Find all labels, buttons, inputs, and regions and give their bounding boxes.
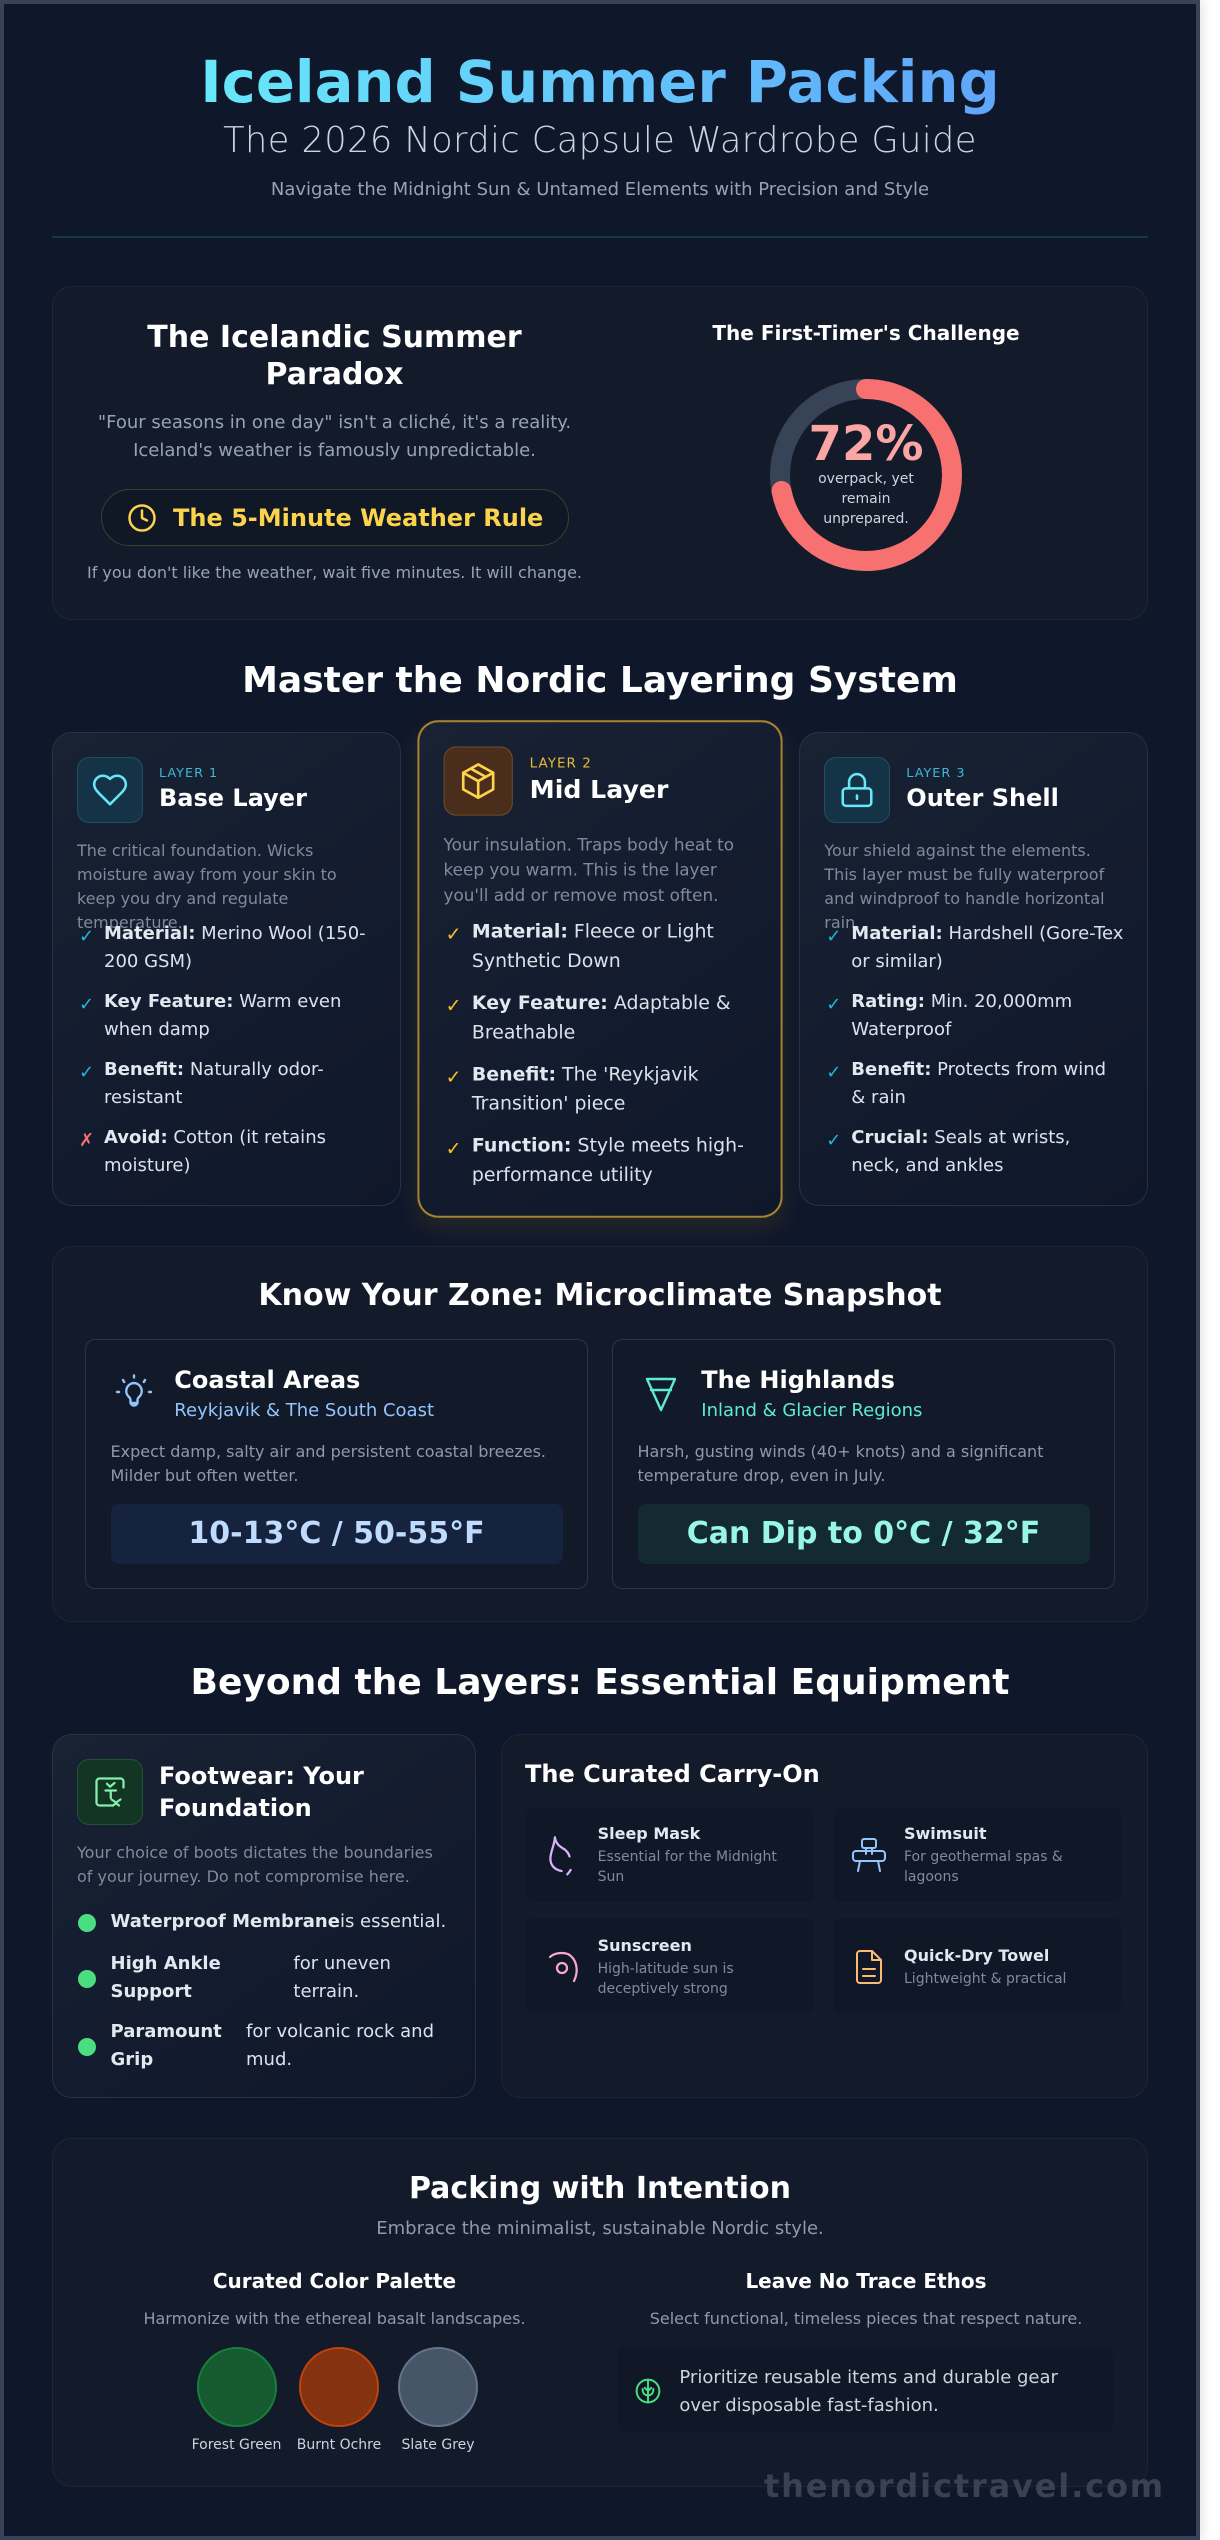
heading: colour palette: Curated Color Palette xyxy=(213,2269,456,2293)
label: layer 1: LAYER 1 xyxy=(159,766,218,781)
list: outer items: Rating: Min. 20,000mm xyxy=(851,991,1072,1012)
text: intention subtitle: Embrace the minimalist, sustainable Nordic style. xyxy=(376,2218,824,2239)
heading: paradox: Paradox xyxy=(266,357,403,392)
text: footwear description: Your choice of boots dictates the boundaries xyxy=(77,1843,433,1862)
list: footwear features: Grip xyxy=(110,2049,153,2070)
text: sunscreen: deceptively strong xyxy=(598,1981,728,1997)
icon: glacier triangle xyxy=(646,1378,676,1412)
list: footwear features: mud. xyxy=(246,2049,292,2070)
list: base items: moisture) xyxy=(104,1155,190,1176)
heading: layering system: Master the Nordic Layering System xyxy=(242,660,958,701)
icon: lock xyxy=(824,757,890,823)
swatch: burnt ochre xyxy=(299,2347,379,2427)
callout: weather rule pill xyxy=(100,489,568,546)
heading: paradox: The Icelandic Summer xyxy=(147,320,522,355)
text: outer description: Your shield against the elements. xyxy=(824,841,1091,860)
list: mid items: Transition' piece xyxy=(472,1093,625,1115)
list: mid items: ✓ xyxy=(446,1067,461,1089)
list: footwear features: for uneven xyxy=(293,1953,391,1974)
panel: highlands xyxy=(612,1339,1115,1589)
swatch: forest green xyxy=(196,2347,276,2427)
text: paradox description: "Four seasons in one day" isn't a cliché, it's a reality. xyxy=(98,412,571,433)
list: outer items xyxy=(826,923,1123,1176)
list: base items: 200 GSM) xyxy=(104,951,192,972)
callout: reusable items xyxy=(617,2347,1113,2433)
text: reusable items xyxy=(679,2367,1058,2416)
text: footwear description xyxy=(77,1843,433,1886)
title: footwear xyxy=(159,1762,364,1822)
stat: highlands temperature xyxy=(638,1504,1090,1564)
text: donut caption: remain xyxy=(841,491,891,507)
list: mid items: ✓ xyxy=(446,995,461,1017)
title: swimsuit: Swimsuit xyxy=(904,1824,987,1843)
heading: challenge: The First-Timer's Challenge xyxy=(712,321,1020,345)
list: footwear features: High Ankle xyxy=(110,1953,221,1974)
list: outer items: neck, and ankles xyxy=(851,1155,1003,1176)
text: sunscreen: High-latitude sun is xyxy=(598,1961,734,1977)
label: burnt ochre: Burnt Ochre xyxy=(297,2437,381,2453)
list: mid items: Material: Fleece or Light xyxy=(472,921,714,943)
list: base items xyxy=(79,923,366,1176)
title: footwear: Foundation xyxy=(159,1794,312,1822)
list: base items: ✓ xyxy=(79,1062,94,1083)
list: mid items: ✓ xyxy=(446,1138,461,1160)
list: mid items: Function: Style meets high- xyxy=(472,1135,744,1157)
text: mid description xyxy=(444,835,734,905)
text: leave no trace description: Select functional, timeless pieces that respect nature. xyxy=(650,2308,1082,2328)
title: towel: Quick-Dry Towel xyxy=(904,1946,1049,1965)
stat: coastal temperature: 10-13°C / 50-55°F xyxy=(188,1516,485,1551)
text: outer description xyxy=(824,841,1105,932)
tagline: Navigate the Midnight Sun & Untamed Elements with Precision and Style xyxy=(271,179,929,200)
list: mid items: performance utility xyxy=(472,1164,653,1186)
stat: highlands temperature: Can Dip to 0°C / 32°F xyxy=(687,1516,1040,1551)
list: base items: Benefit: Naturally odor- xyxy=(104,1059,324,1080)
text: sleep mask xyxy=(598,1849,777,1885)
panel: microclimate snapshot xyxy=(52,1246,1148,1622)
list: outer items: ✓ xyxy=(826,1130,841,1151)
text: paradox description: Iceland's weather is famously unpredictable. xyxy=(133,440,536,461)
subtitle: The 2026 Nordic Capsule Wardrobe Guide xyxy=(223,120,977,160)
title: sunscreen: Sunscreen xyxy=(598,1936,692,1955)
text: reusable items: Prioritize reusable items and durable gear xyxy=(679,2367,1058,2388)
text: coastal description: Milder but often wetter. xyxy=(110,1466,299,1485)
item: sunscreen xyxy=(525,1918,814,2013)
list: outer items: Benefit: Protects from wind xyxy=(851,1059,1106,1080)
text: reusable items: over disposable fast-fashion. xyxy=(679,2395,939,2416)
text: footwear description: of your journey. Do not compromise here. xyxy=(77,1867,410,1886)
heading: intention: Packing with Intention xyxy=(409,2171,791,2206)
panel: packing with intention xyxy=(52,2138,1148,2487)
list: outer items: ✓ xyxy=(826,926,841,947)
text: highlands description: Harsh, gusting winds (40+ knots) and a significant xyxy=(638,1442,1043,1461)
text: highlands description: temperature drop, even in July. xyxy=(638,1466,885,1485)
list: base items: resistant xyxy=(104,1087,182,1108)
icon: heart xyxy=(77,757,143,823)
title: Iceland Summer Packing xyxy=(200,49,1000,116)
title: base layer: Base Layer xyxy=(159,784,307,812)
text: mid description: keep you warm. This is the layer xyxy=(444,860,717,880)
title: mid layer: Mid Layer xyxy=(530,774,668,804)
list: footwear features: Support xyxy=(110,1981,192,2002)
panel: Icelandic summer paradox xyxy=(52,286,1148,620)
text: swimsuit: lagoons xyxy=(904,1869,959,1885)
label: forest green: Forest Green xyxy=(192,2437,281,2453)
panel: mid layer xyxy=(417,720,783,1218)
title: footwear: Footwear: Your xyxy=(159,1762,364,1790)
text: base description: keep you dry and regulate xyxy=(77,889,288,908)
text: swimsuit: For geothermal spas & xyxy=(904,1849,1063,1865)
swatch: slate grey xyxy=(398,2347,478,2427)
list: footwear features: Paramount xyxy=(110,2021,222,2042)
text: towel: Lightweight & practical xyxy=(904,1971,1066,1987)
list: base items: ✗ xyxy=(79,1130,94,1151)
list: base items: ✓ xyxy=(79,994,94,1015)
list: outer items: Waterproof xyxy=(851,1019,951,1040)
watermark: thenordictravel.com xyxy=(764,2467,1165,2505)
list: base items: Key Feature: Warm even xyxy=(104,991,341,1012)
list: base items: Avoid: Cotton (it retains xyxy=(104,1127,326,1148)
panel: carry-on xyxy=(501,1734,1148,2098)
icon: sunscreen xyxy=(548,1952,578,1982)
text: swimsuit xyxy=(904,1849,1063,1885)
title: highlands: The Highlands xyxy=(701,1366,895,1394)
list: footwear features: Waterproof Membraneis essential. xyxy=(110,1911,446,1932)
heading: microclimate: Know Your Zone: Microclimate Snapshot xyxy=(258,1278,942,1313)
list: mid items: ✓ xyxy=(446,924,461,946)
text: coastal description xyxy=(110,1442,546,1485)
text: rule name: The 5-Minute Weather Rule xyxy=(173,504,543,532)
text: donut caption: unprepared. xyxy=(823,511,909,527)
icon: leaf circle xyxy=(636,2378,660,2404)
heading: carry-on: The Curated Carry-On xyxy=(525,1760,820,1788)
item: quick-dry towel xyxy=(832,1918,1121,2013)
text: base description xyxy=(76,841,337,932)
list: outer items: ✓ xyxy=(826,1062,841,1083)
list: outer items: Crucial: Seals at wrists, xyxy=(851,1127,1070,1148)
text: sleep mask: Essential for the Midnight xyxy=(598,1849,777,1865)
icon: sleep mask xyxy=(549,1836,572,1876)
list: base items: ✓ xyxy=(79,926,94,947)
stat: coastal temperature xyxy=(110,1504,562,1564)
text: mid description: you'll add or remove most often. xyxy=(444,885,718,905)
list: outer items: & rain xyxy=(851,1087,906,1108)
text: donut caption xyxy=(818,471,914,527)
list: base items: when damp xyxy=(104,1019,210,1040)
chart: 72 percent donut xyxy=(770,379,962,571)
item: swimsuit xyxy=(832,1807,1121,1902)
list: footwear features xyxy=(78,1911,446,2070)
heading: essential equipment: Beyond the Layers: Essential Equipment xyxy=(191,1662,1009,1702)
title: sleep mask: Sleep Mask xyxy=(598,1824,700,1843)
icon: boot xyxy=(77,1759,143,1825)
text: highlands description xyxy=(638,1442,1044,1485)
list: mid items xyxy=(446,921,744,1186)
heading: paradox xyxy=(147,320,522,392)
list: mid items: Breathable xyxy=(472,1022,575,1044)
label: slate grey: Slate Grey xyxy=(401,2437,475,2453)
list: mid items: Synthetic Down xyxy=(472,950,621,972)
header xyxy=(52,49,1148,238)
icon: swimsuit xyxy=(852,1838,886,1872)
list: mid items: Key Feature: Adaptable & xyxy=(472,992,731,1014)
label: layer 3: LAYER 3 xyxy=(906,766,965,781)
panel: base layer xyxy=(52,732,401,1206)
text: donut caption: overpack, yet xyxy=(818,471,914,487)
subtitle: highlands region: Inland & Glacier Regions xyxy=(701,1400,922,1421)
text: mid description: Your insulation. Traps body heat to xyxy=(444,835,734,855)
panel: footwear xyxy=(52,1734,476,2098)
text: outer description: This layer must be fully waterproof xyxy=(824,865,1104,884)
list: outer items: ✓ xyxy=(826,994,841,1015)
panel: outer shell xyxy=(799,732,1148,1206)
text: palette description: Harmonize with the ethereal basalt landscapes. xyxy=(143,2308,526,2328)
number: 72%: 72% xyxy=(809,416,923,472)
list: outer items: or similar) xyxy=(851,951,943,972)
text: rule explanation: If you don't like the weather, wait five minutes. It will change. xyxy=(87,563,582,582)
item: sleep mask xyxy=(525,1807,814,1902)
icon: box xyxy=(444,746,513,816)
list: footwear features: for volcanic rock and xyxy=(246,2021,434,2042)
text: base description: moisture away from your skin to xyxy=(77,865,337,884)
list: outer items: Material: Hardshell (Gore-Tex xyxy=(851,923,1123,944)
title: outer shell: Outer Shell xyxy=(906,784,1059,812)
text: outer description: rain. xyxy=(824,913,860,932)
label: layer 2: LAYER 2 xyxy=(530,756,592,772)
text: sleep mask: Sun xyxy=(598,1869,624,1885)
heading: leave no trace: Leave No Trace Ethos xyxy=(745,2269,987,2293)
text: base description: The critical foundation. Wicks xyxy=(77,841,313,860)
text: coastal description: Expect damp, salty air and persistent coastal breezes. xyxy=(110,1442,546,1461)
list: base items: Material: Merino Wool (150- xyxy=(104,923,366,944)
panel: coastal areas xyxy=(85,1339,588,1589)
title: coastal: Coastal Areas xyxy=(174,1366,360,1394)
text: base description: temperature. xyxy=(77,913,183,932)
icon: bulb xyxy=(116,1374,152,1407)
text: sunscreen xyxy=(598,1961,734,1997)
list: footwear features: terrain. xyxy=(293,1981,359,2002)
text: paradox description xyxy=(98,412,571,461)
list: mid items: Benefit: The 'Reykjavik xyxy=(472,1064,699,1086)
icon: towel document xyxy=(856,1950,882,1984)
icon: clock xyxy=(128,504,156,532)
text: outer description: and windproof to handle horizontal xyxy=(824,889,1105,908)
subtitle: coastal region: Reykjavik & The South Coast xyxy=(174,1400,434,1421)
